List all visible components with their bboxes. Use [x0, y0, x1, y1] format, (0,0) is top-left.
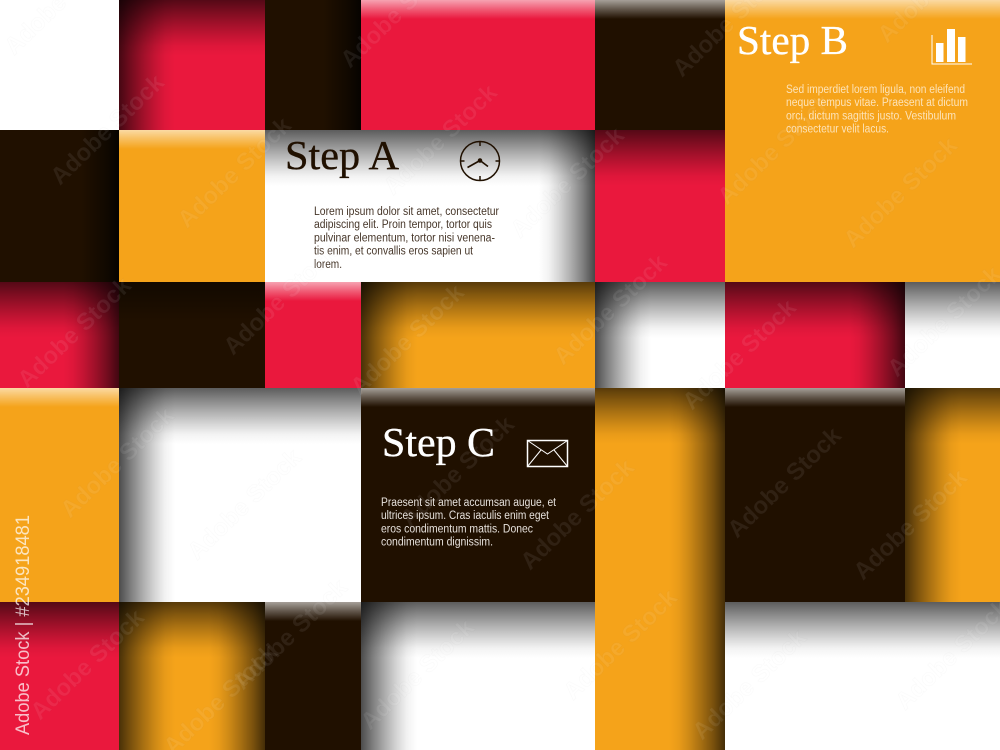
watermark pattern: Adobe Stock — [515, 454, 640, 575]
tile: red third row right — [725, 282, 905, 388]
tile: orange third row — [361, 282, 595, 388]
step A body text: Lorem ipsum dolor sit amet, consectetur — [314, 206, 499, 218]
watermark pattern: Adobe Stock — [45, 69, 170, 190]
watermark pattern: Adobe Stock — [12, 272, 137, 393]
tile: white third row — [595, 282, 725, 388]
step B body text — [786, 84, 968, 136]
watermark pattern: Adobe Stock — [228, 574, 353, 695]
step C body text: ultrices ipsum. Cras iaculis enim eget — [381, 510, 550, 522]
tile: tall orange column — [595, 388, 725, 750]
step C body text: Praesent sit amet accumsan augue, et — [381, 497, 557, 509]
step A body text — [314, 206, 499, 271]
tile: red wide top — [361, 0, 595, 130]
watermark pattern: Adobe Stock — [345, 279, 470, 400]
step A body text: pulvinar elementum, tortor nisi venena- — [314, 232, 495, 244]
tile: dark fourth row right — [725, 388, 905, 602]
tile: orange second row — [119, 130, 265, 282]
tile: dark bottom — [265, 602, 361, 750]
tile: dark third row — [119, 282, 265, 388]
tile: orange fourth row left — [0, 388, 119, 602]
step C heading: Step C — [382, 419, 495, 465]
watermark pattern: Adobe Stock — [25, 604, 150, 725]
tile: red bottom left — [0, 602, 119, 750]
watermark pattern: Adobe Stock — [355, 614, 480, 735]
watermark pattern: Adobe Stock — [712, 89, 837, 210]
watermark pattern: Adobe Stock — [848, 464, 973, 585]
stock id side label: Adobe Stock | #234918481 — [13, 515, 34, 735]
tile: dark top right — [595, 0, 725, 130]
watermark pattern: Adobe Stock — [838, 132, 963, 253]
watermark pattern: Adobe Stock — [687, 624, 812, 745]
tile: white bottom right — [725, 602, 1000, 750]
icon: bar chart — [932, 29, 972, 64]
tile: red third row small — [265, 282, 361, 388]
watermark pattern: Adobe Stock — [218, 239, 343, 360]
tile: orange fourth row far right — [905, 388, 1000, 602]
tile: dark left — [0, 130, 119, 282]
step A body text: lorem. — [314, 259, 342, 271]
step C body text — [381, 497, 557, 549]
step B heading: Step B — [737, 17, 848, 63]
step A heading: Step A — [285, 132, 399, 178]
watermark pattern: Adobe Stock — [378, 79, 503, 200]
step B body text: Sed imperdiet lorem ligula, non eleifend — [786, 84, 965, 96]
tile: orange bottom — [119, 602, 265, 750]
panel: step A white tile — [265, 130, 595, 282]
step A body text: adipiscing elit. Proin tempor, tortor quis — [314, 219, 492, 231]
watermark pattern: Adobe Stock — [172, 112, 297, 233]
tile: white bottom — [361, 602, 595, 750]
tile: red top — [119, 0, 265, 130]
step B body text: consectetur velit lacus. — [786, 124, 889, 136]
tile: dark top — [265, 0, 361, 130]
watermark pattern: Adobe Stock — [558, 584, 683, 705]
watermark pattern: Adobe Stock — [677, 294, 802, 415]
tile: white top left — [0, 0, 119, 130]
watermark pattern: Adobe Stock — [395, 411, 520, 532]
tile: white fourth row — [119, 388, 361, 602]
step B body text: orci, dictum sagittis justo. Vestibulum — [786, 110, 956, 122]
panel: step B orange tile — [725, 0, 1000, 282]
watermark pattern: Adobe Stock — [505, 122, 630, 243]
icon: envelope — [528, 440, 568, 466]
panel: step C dark tile — [361, 388, 595, 602]
step A body text: tis enim, et convallis eros sapien ut — [314, 246, 474, 258]
step B body text: neque tempus vitae. Praesent at dictum — [786, 97, 968, 109]
icon: clock — [460, 142, 500, 180]
tile: white third row far right — [905, 282, 1000, 388]
watermark pattern: Adobe Stock — [182, 444, 307, 565]
tile: red second row — [595, 130, 725, 282]
watermark pattern: Adobe Stock — [722, 422, 847, 543]
watermark pattern: Adobe Stock — [55, 402, 180, 523]
watermark pattern: Adobe Stock — [548, 249, 673, 370]
tile: red third row left — [0, 282, 119, 388]
step C body text: eros condimentum mattis. Donec — [381, 523, 533, 535]
step C body text: condimentum dignissim. — [381, 537, 493, 549]
